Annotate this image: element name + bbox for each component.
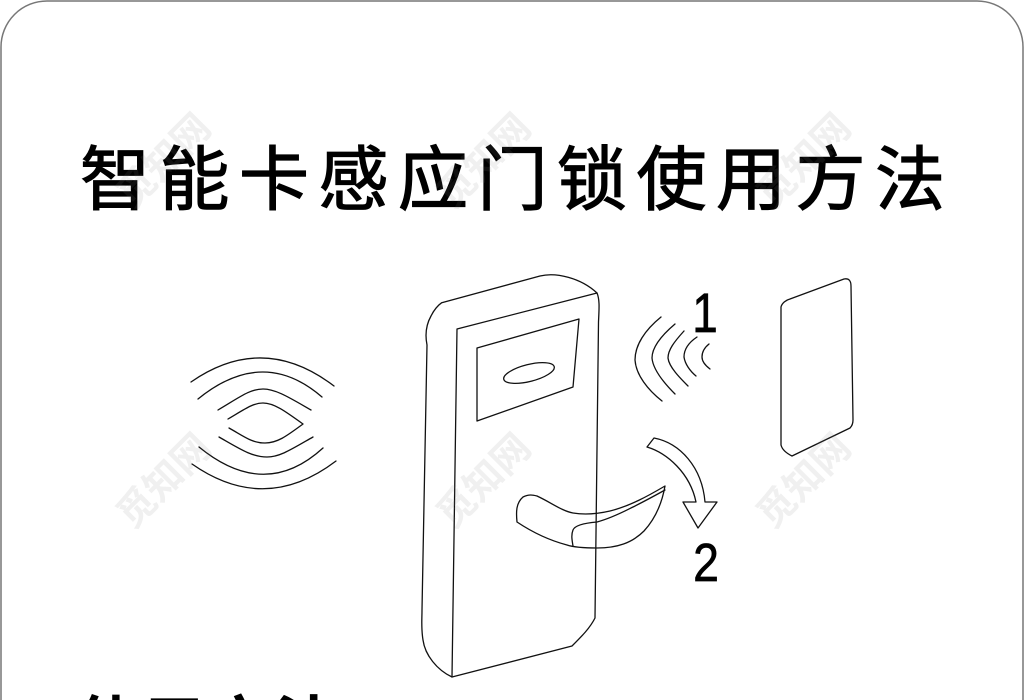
arrow: turn handle down	[647, 438, 717, 528]
lock front face	[452, 293, 597, 677]
watermarks: 觅知网	[429, 106, 540, 217]
watermarks: 觅知网	[749, 106, 860, 217]
watermarks: 觅知网	[109, 106, 220, 217]
step number 2: 2	[693, 532, 719, 593]
illustration: door lock	[422, 275, 665, 677]
step number 1: 1	[692, 282, 718, 344]
icon: contactless wave symbol	[191, 358, 336, 489]
watermarks: 觅知网	[109, 426, 220, 537]
lock body outline	[422, 275, 599, 677]
title: 智能卡感应门锁使用方法	[80, 141, 954, 219]
icon: key card	[781, 279, 853, 456]
card reader window	[477, 319, 579, 421]
handle inner edge	[572, 490, 665, 546]
watermarks: 觅知网	[749, 426, 860, 537]
reader slot	[502, 358, 556, 388]
icon: signal waves	[635, 317, 710, 401]
door handle	[517, 486, 665, 548]
watermarks: 觅知网	[429, 426, 540, 537]
watermarks	[109, 106, 860, 537]
